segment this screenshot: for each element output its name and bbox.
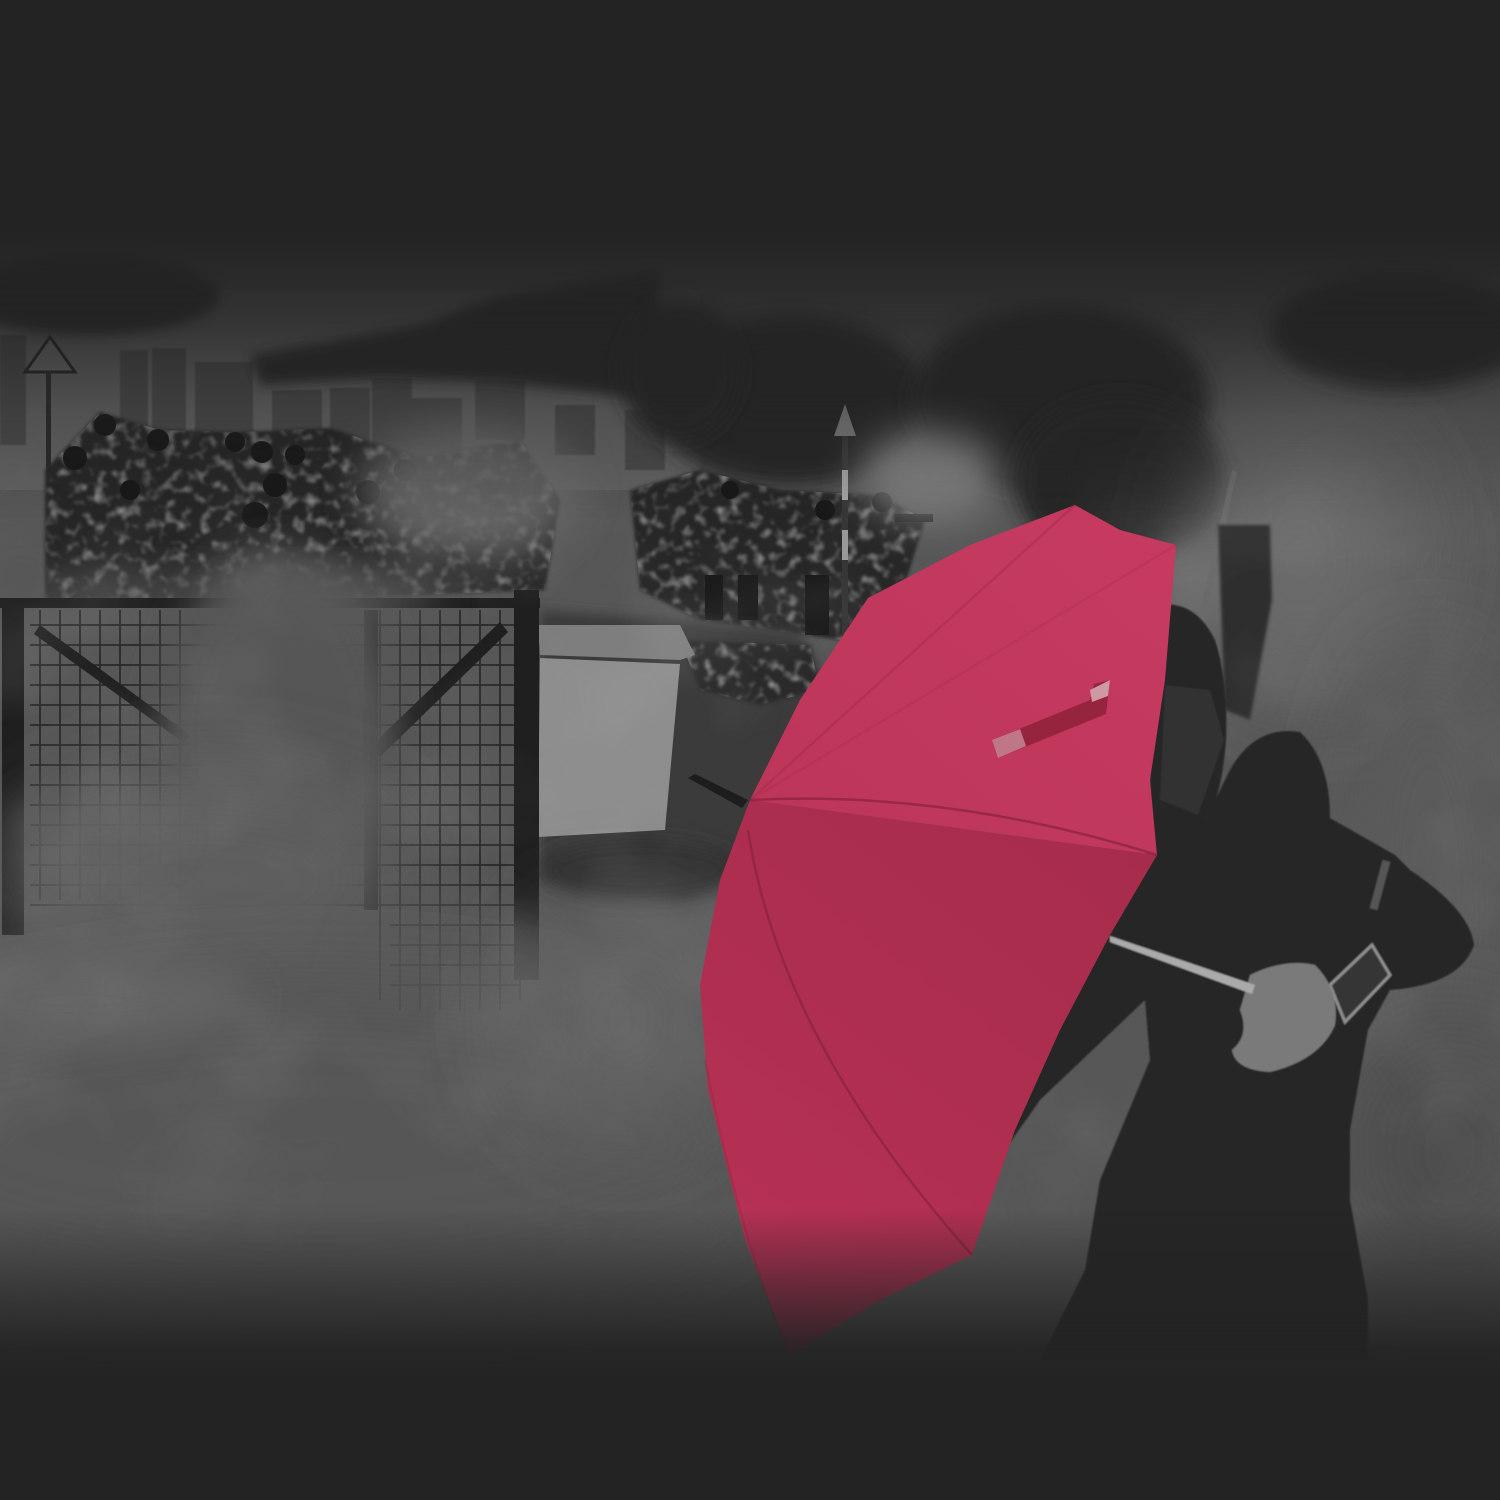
- striped sign pole: [834, 404, 856, 640]
- protester silhouette: [1005, 604, 1474, 1360]
- metal mesh fence: [0, 590, 540, 1010]
- warning road sign: [25, 337, 75, 472]
- red umbrella: [688, 505, 1176, 1355]
- road and rubble of bricks: [540, 610, 830, 900]
- distant figure with pole at right: [1198, 470, 1272, 720]
- smoke texture: [0, 512, 1464, 1105]
- sky and distant haze: [0, 290, 1500, 700]
- canopy lower panels: [700, 800, 1157, 1355]
- smoke layer behind fence: [0, 420, 1410, 690]
- umbrella tip: [688, 774, 748, 808]
- wrist guard and glove: [1110, 860, 1390, 1072]
- bottom dark fade: [0, 1210, 1500, 1380]
- distant tower blocks: [0, 335, 665, 470]
- torso and legs: [1005, 731, 1474, 1360]
- canopy seams: [705, 505, 1176, 1355]
- canopy folded strap: [992, 680, 1110, 758]
- ground tear gas cloud: [0, 650, 1500, 1290]
- riot police line, left group: [45, 412, 560, 600]
- dark hillside and treeline: [0, 255, 1500, 565]
- bottom dark band: [0, 1380, 1500, 1500]
- canopy upper panels: [750, 505, 1176, 855]
- top dark fade: [0, 0, 1500, 520]
- fence fogged by tear gas: [10, 550, 550, 1040]
- riot police line, right group: [630, 470, 933, 640]
- wheelie bin and white board: [538, 625, 695, 837]
- gas mask and helmet: [1150, 604, 1262, 860]
